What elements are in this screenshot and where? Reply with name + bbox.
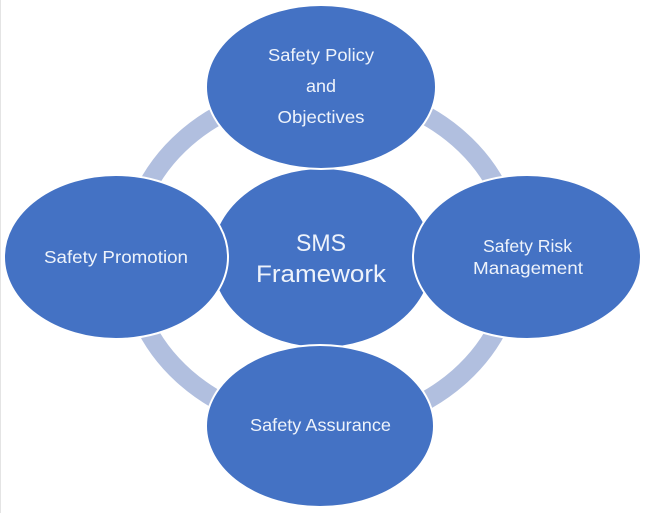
right ellipse: Safety Risk Management: Management — [473, 258, 583, 278]
bottom ellipse: Safety Assurance: Safety Assurance — [250, 415, 391, 435]
left ellipse: Safety Promotion — [4, 175, 228, 339]
center ellipse: SMS Framework — [211, 168, 433, 348]
right ellipse: Safety Risk Management — [413, 175, 641, 339]
left ellipse: Safety Promotion: Safety Promotion — [44, 247, 188, 267]
top ellipse: Safety Policy and Objectives: Safety Policy — [268, 45, 374, 65]
center ellipse: SMS Framework: Framework — [256, 261, 387, 288]
ring connecting the outer ellipses — [129, 89, 515, 427]
top ellipse: Safety Policy and Objectives — [206, 5, 436, 169]
right ellipse: Safety Risk Management: Safety Risk — [483, 236, 572, 256]
bottom ellipse: Safety Assurance — [206, 345, 434, 507]
center ellipse: SMS Framework: SMS — [296, 230, 346, 257]
top ellipse: Safety Policy and Objectives: and — [306, 76, 336, 96]
top ellipse: Safety Policy and Objectives: Objectives — [278, 107, 365, 127]
